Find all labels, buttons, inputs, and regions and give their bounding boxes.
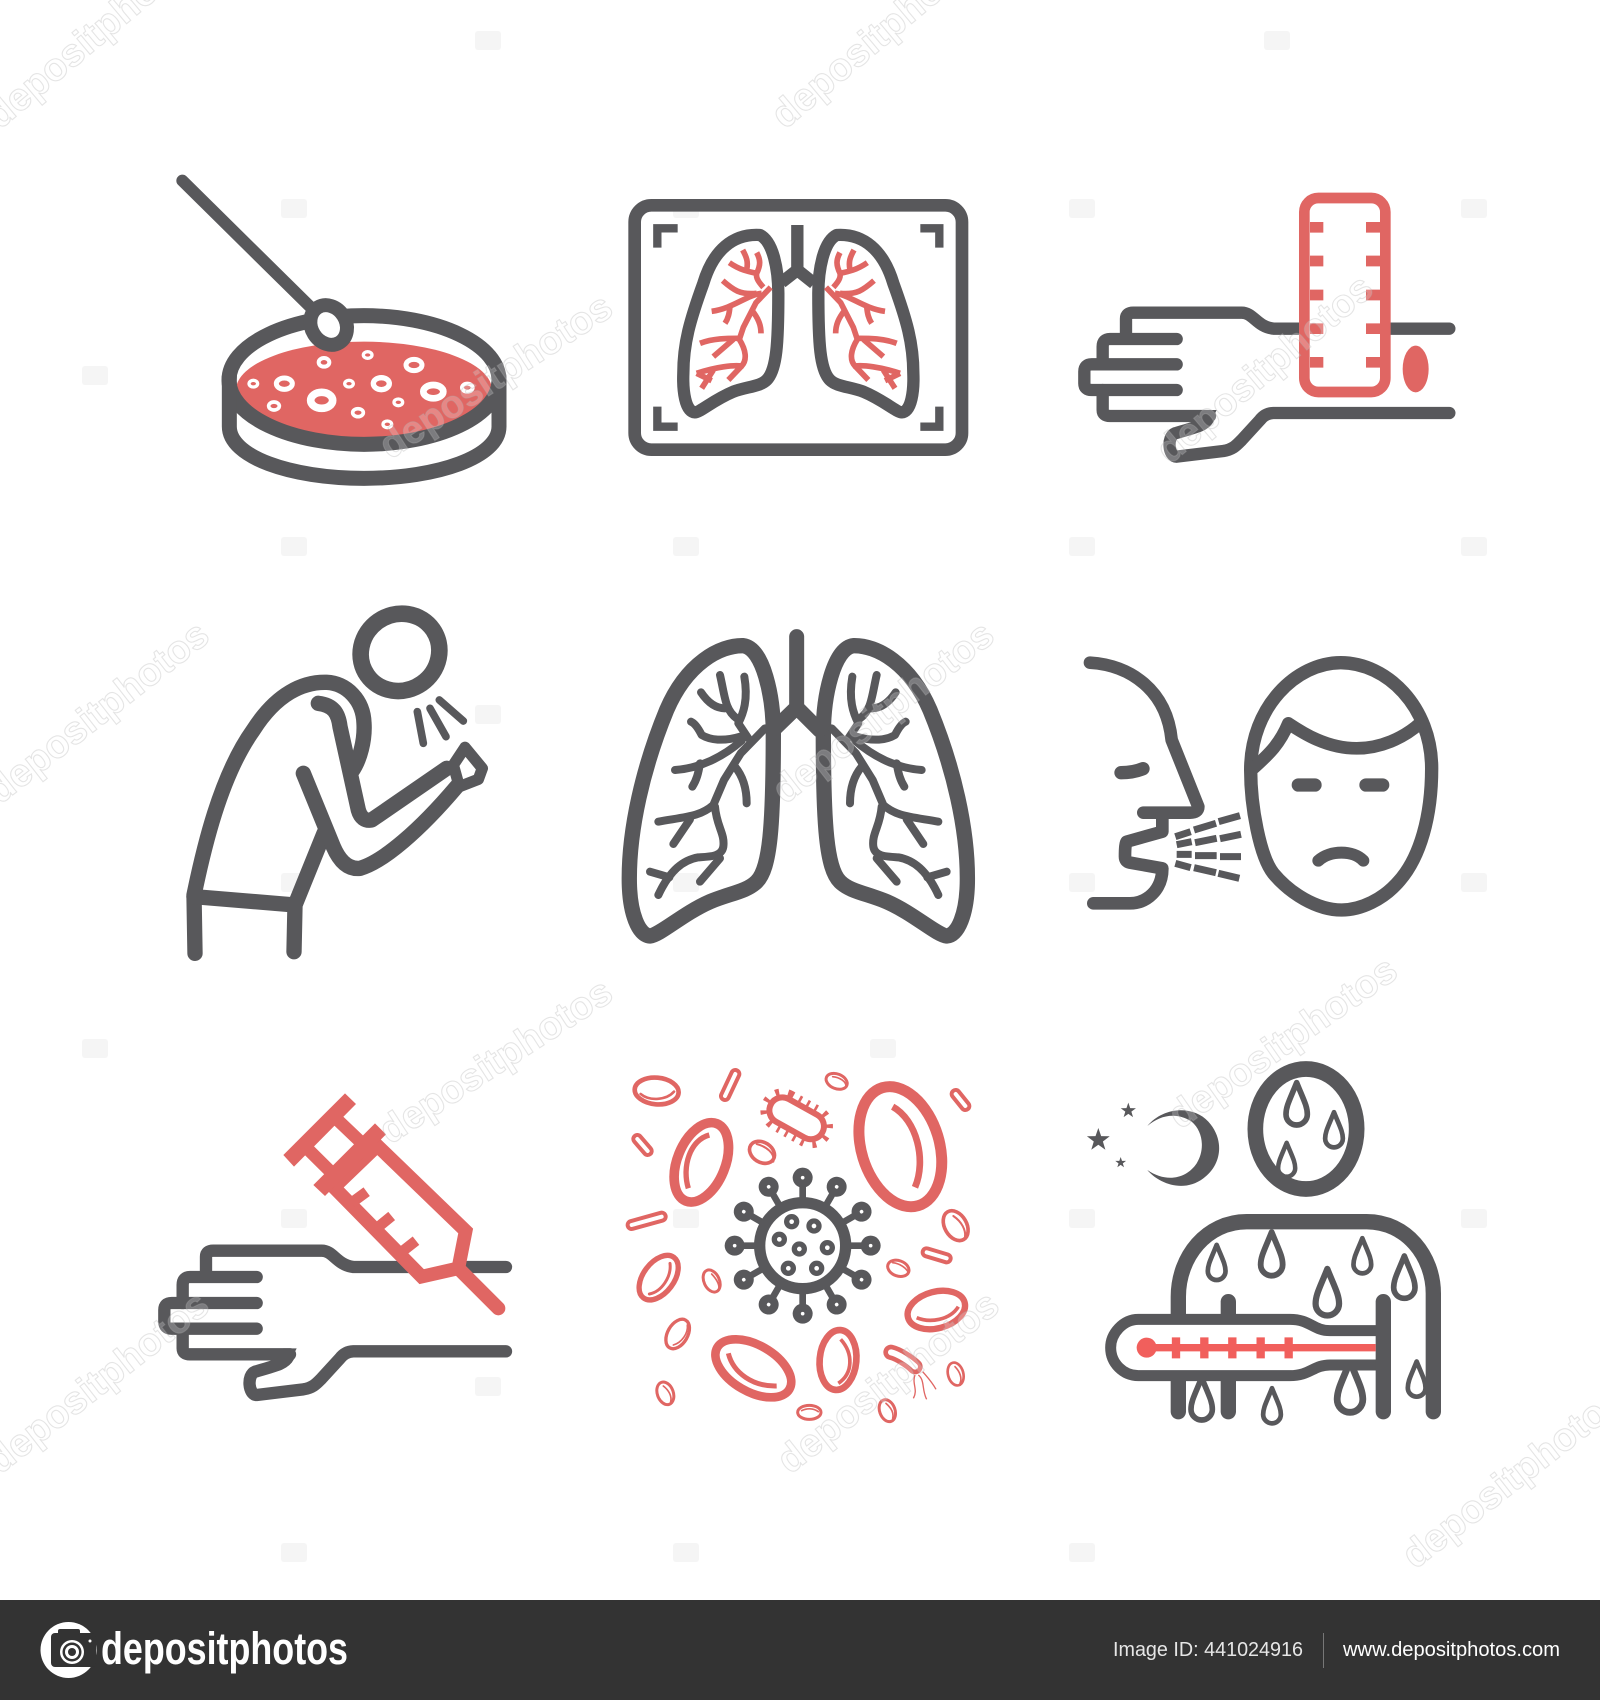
- face: [1251, 663, 1432, 910]
- head: [345, 598, 455, 706]
- profile eye: [1121, 769, 1143, 773]
- breath spray: [1175, 816, 1241, 878]
- icon: arm with syringe: [164, 1093, 506, 1395]
- syringe: [283, 1093, 498, 1308]
- watermark text: depositphotos: [1148, 266, 1382, 472]
- arm: [1084, 313, 1449, 457]
- dish: [229, 316, 499, 478]
- left bronchi: [650, 675, 765, 895]
- virus: [725, 1168, 881, 1324]
- bronchi right: [826, 250, 900, 388]
- icon: blood cells, bacteria and virus: [631, 1070, 973, 1424]
- rod shaped cells: [632, 1074, 965, 1258]
- watermark text: depositphotos: [371, 285, 620, 468]
- bronchi left: [697, 250, 771, 388]
- watermark text: depositphotos: [764, 613, 1002, 812]
- hair: [1253, 723, 1420, 768]
- left lung: [629, 646, 773, 936]
- trachea: [775, 637, 819, 730]
- culture medium: [236, 342, 492, 438]
- right bronchi: [832, 675, 947, 895]
- moon: [1147, 1110, 1219, 1186]
- swab: [182, 181, 354, 352]
- flagellated bacterium: [891, 1352, 936, 1399]
- icon: petri dish with swab: [182, 181, 499, 478]
- body: [194, 682, 457, 953]
- colonies: [249, 352, 473, 428]
- right lung: [823, 646, 967, 936]
- fist: [453, 747, 482, 787]
- icon: lungs: [629, 637, 967, 936]
- image id: Image ID: 441024916: [1113, 1639, 1303, 1661]
- torso: [1178, 1222, 1433, 1412]
- stars: [1087, 1103, 1136, 1167]
- icon: night sweats and fever: [1087, 1069, 1433, 1423]
- icon: arm with blood pressure cuff: [1084, 198, 1449, 457]
- watermark text: depositphotos: [1160, 948, 1405, 1137]
- icon: coughing person: [194, 598, 482, 953]
- cuff: [1304, 198, 1385, 392]
- film frame: [635, 205, 962, 450]
- lungs outline: [683, 225, 913, 412]
- blood vessel: [1403, 346, 1429, 392]
- icon: bad breath between two faces: [1090, 663, 1432, 910]
- website: www.depositphotos.com: [1342, 1639, 1560, 1661]
- spiky bacterium: [765, 1093, 829, 1144]
- watermark camera marks: [82, 31, 1487, 1562]
- watermark text: depositphotos: [371, 970, 620, 1153]
- thumb web: [272, 1348, 297, 1370]
- icon: chest x-ray: [635, 205, 962, 450]
- red blood cells: [631, 1070, 973, 1424]
- thermometer: [1111, 1319, 1383, 1376]
- profile: [1090, 663, 1198, 813]
- footer logo text: depositphotos: [101, 1623, 348, 1674]
- body drops: [1191, 1232, 1426, 1423]
- thumb web: [1192, 410, 1217, 432]
- eyes: [1298, 765, 1383, 805]
- frown: [1318, 853, 1363, 861]
- cough marks: [417, 700, 463, 743]
- footer logo mark: [40, 1622, 96, 1678]
- head: [1255, 1069, 1357, 1189]
- corner marks: [657, 228, 939, 427]
- arm: [164, 1251, 506, 1395]
- watermark text: depositphotos: [769, 1283, 1007, 1482]
- head drops: [1278, 1083, 1343, 1177]
- footer bar: [0, 1600, 1600, 1700]
